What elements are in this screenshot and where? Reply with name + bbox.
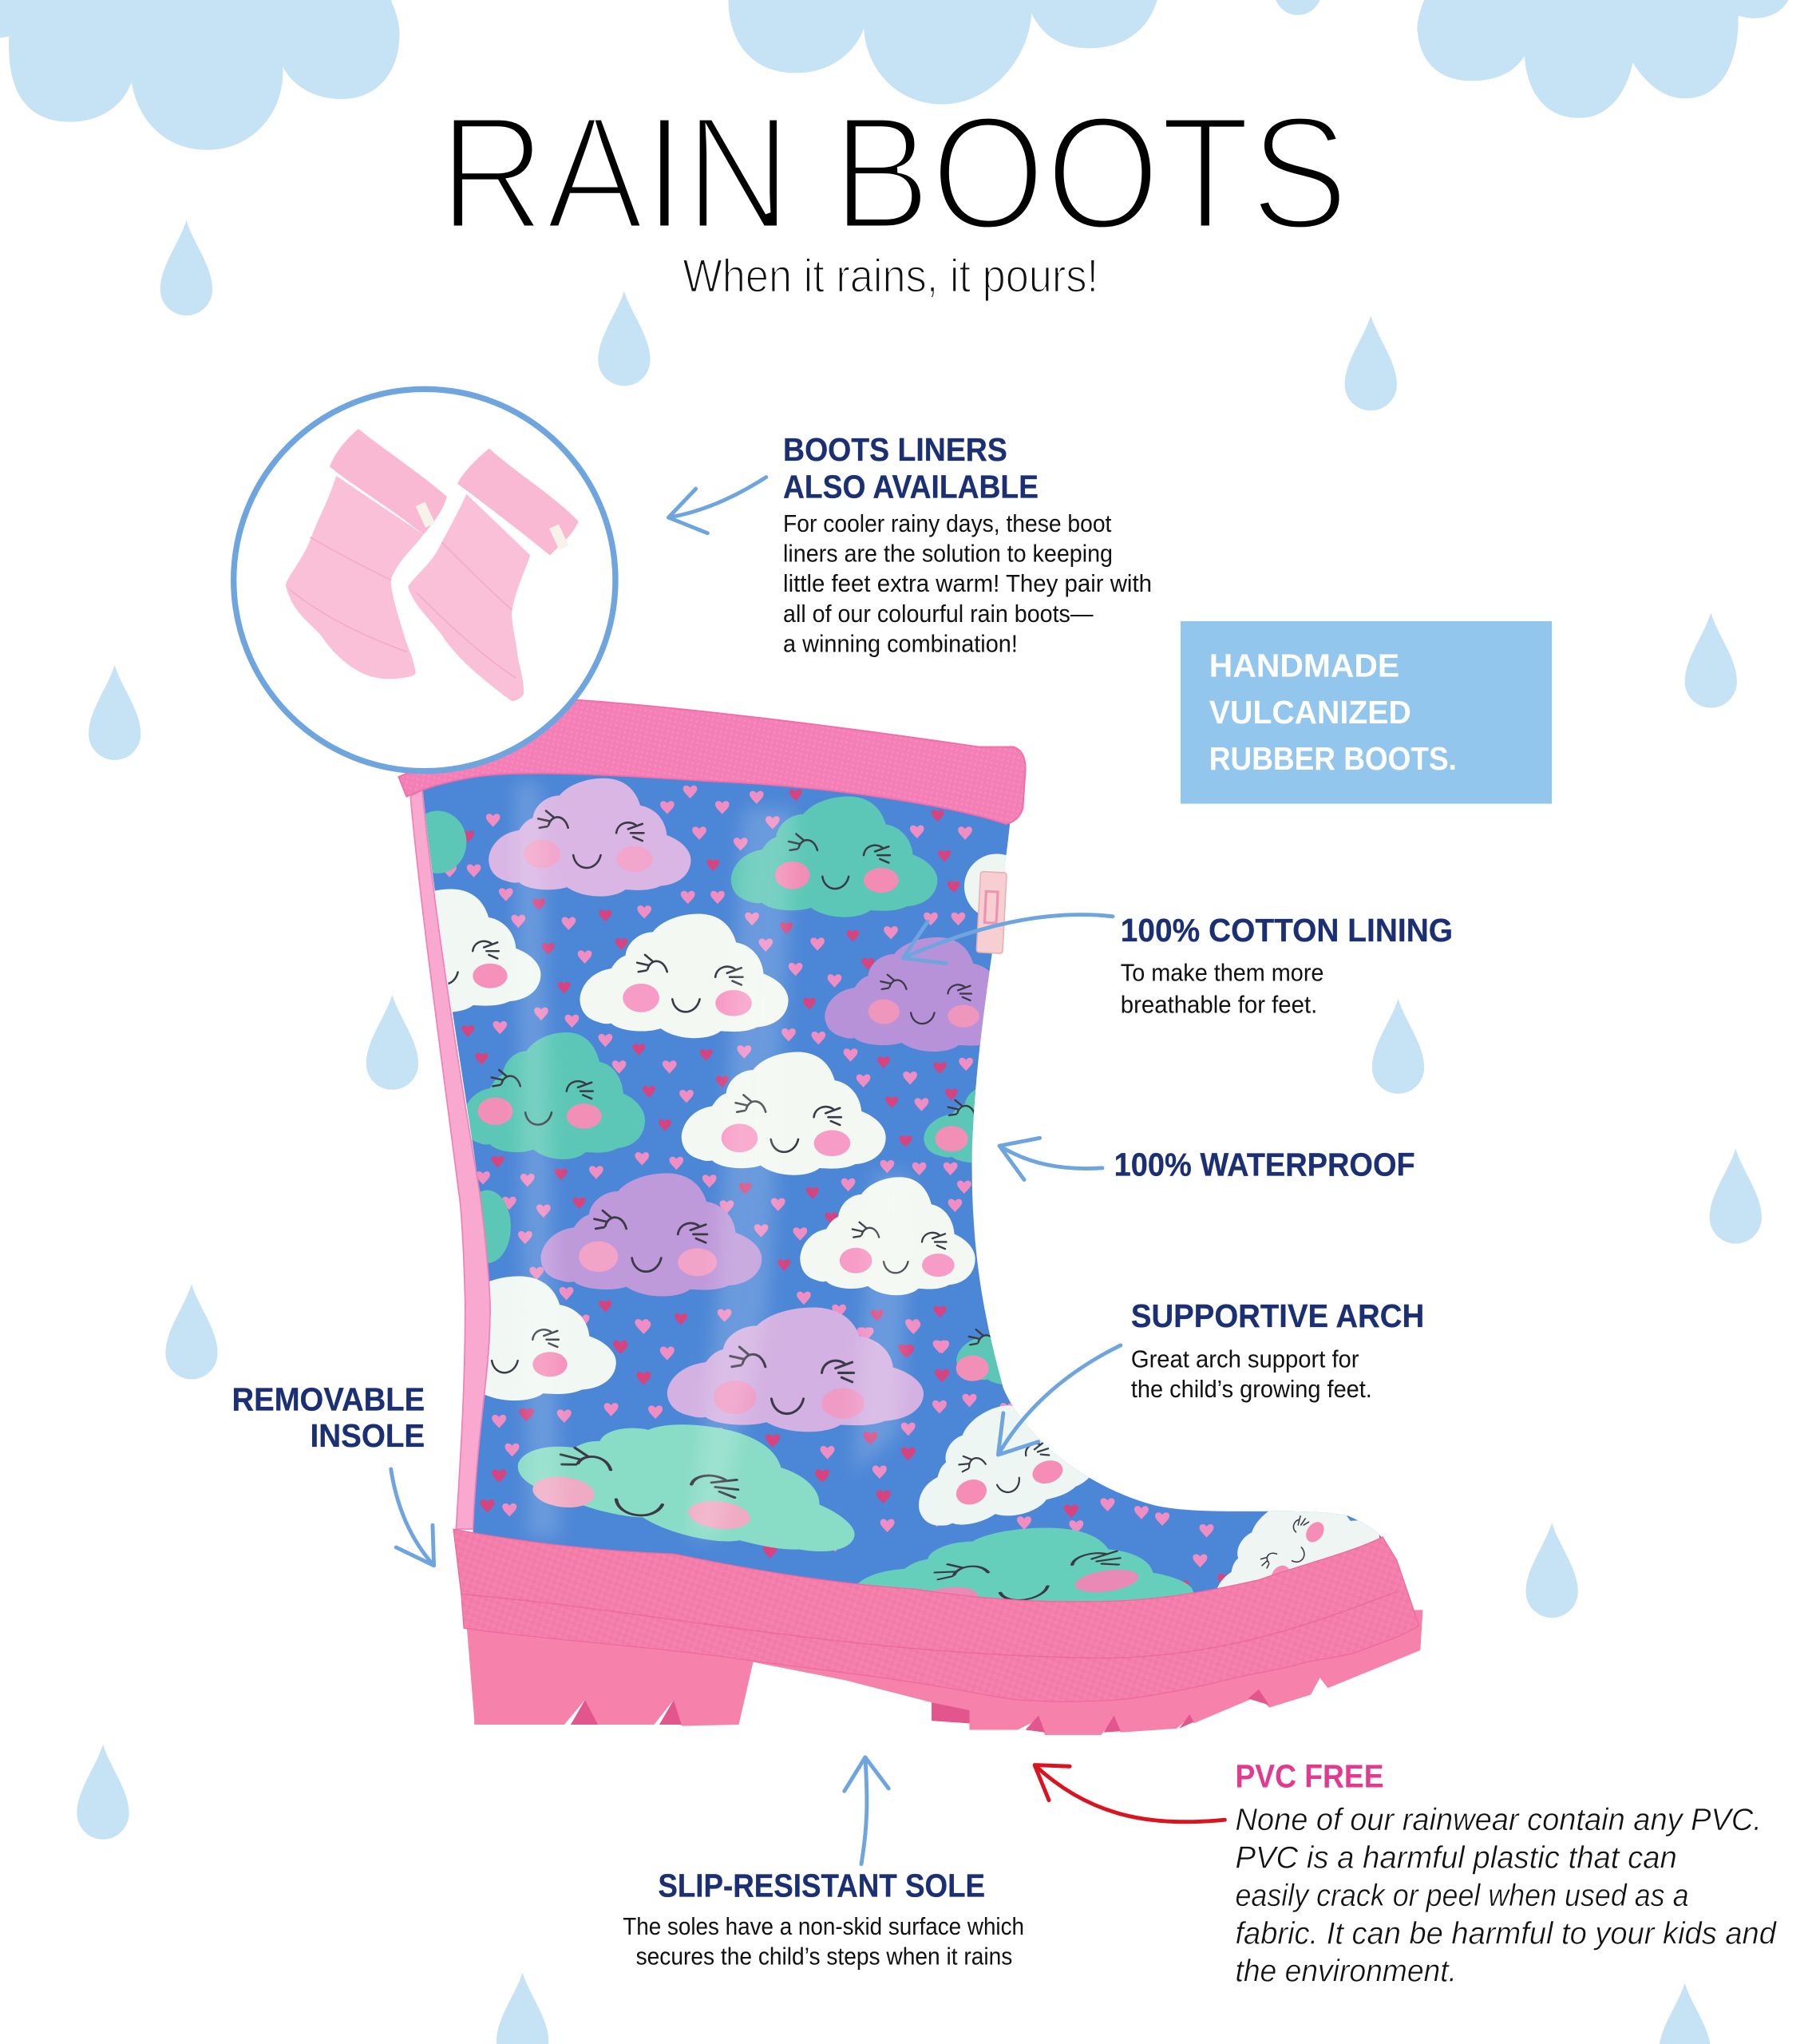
heading: BOOTS LINERS bbox=[783, 431, 1007, 468]
boot collar bbox=[398, 700, 1026, 824]
body text bbox=[783, 511, 1152, 657]
arrow to arch bbox=[998, 1345, 1121, 1455]
back seam strip bbox=[410, 790, 490, 1529]
callout: cotton lining bbox=[903, 912, 1453, 1019]
heading: SUPPORTIVE ARCH bbox=[1131, 1297, 1424, 1334]
body text: little feet extra warm! They pair with bbox=[783, 571, 1152, 597]
callout: supportive arch bbox=[998, 1297, 1424, 1455]
body text: secures the child’s steps when it rains bbox=[636, 1943, 1012, 1970]
banner: handmade vulcanized rubber boots: VULCANIZED bbox=[1209, 694, 1411, 731]
heading: REMOVABLE bbox=[232, 1381, 425, 1418]
banner: handmade vulcanized rubber boots bbox=[1181, 621, 1552, 804]
arrow to sole bbox=[845, 1757, 888, 1864]
red arrow bbox=[1035, 1765, 1225, 1822]
body text bbox=[1235, 1803, 1777, 1989]
rain boot bbox=[332, 700, 1434, 1735]
body text bbox=[623, 1914, 1024, 1970]
background clouds bbox=[0, 0, 1789, 150]
body text: easily crack or peel when used as a bbox=[1235, 1879, 1689, 1913]
subtitle: When it rains, it pours! bbox=[682, 251, 1098, 303]
callout: boot liners bbox=[668, 431, 1152, 657]
cloud: top left bbox=[0, 0, 400, 150]
arrow to liners bbox=[668, 477, 766, 533]
arrow to insole bbox=[391, 1469, 434, 1566]
heading: ALSO AVAILABLE bbox=[783, 469, 1039, 505]
welt crease bbox=[461, 1591, 1397, 1658]
heading: 100% WATERPROOF bbox=[1114, 1147, 1415, 1183]
cloud: top right bbox=[1417, 0, 1789, 118]
callout: removable insole bbox=[232, 1381, 434, 1566]
cloud print bbox=[332, 778, 1390, 1630]
glossy highlights bbox=[515, 782, 912, 1539]
body text: fabric. It can be harmful to your kids and bbox=[1235, 1916, 1777, 1951]
heading: PVC FREE bbox=[1235, 1757, 1384, 1794]
left liner sock bbox=[285, 429, 447, 679]
boot sole with tread bbox=[466, 1610, 1423, 1735]
body text: The soles have a non-skid surface which bbox=[623, 1914, 1024, 1940]
body text: the environment. bbox=[1235, 1955, 1457, 1989]
banner: handmade vulcanized rubber boots: RUBBER BOOTS. bbox=[1209, 740, 1457, 777]
small drop at top edge bbox=[1274, 0, 1321, 15]
body text: None of our rainwear contain any PVC. bbox=[1235, 1803, 1762, 1837]
heart print (lower boot) bbox=[481, 1321, 1232, 1594]
body text: For cooler rainy days, these boot bbox=[783, 511, 1112, 537]
callout: waterproof bbox=[999, 1138, 1415, 1183]
body text: PVC is a harmful plastic that can bbox=[1235, 1841, 1677, 1876]
inset circle: boot liners bbox=[234, 389, 615, 771]
body text: all of our colourful rain boots— bbox=[783, 601, 1094, 628]
heading bbox=[232, 1381, 425, 1454]
right liner sock bbox=[408, 449, 579, 701]
arrow to lining bbox=[903, 915, 1113, 964]
heart print (upper shaft) bbox=[442, 786, 973, 1384]
body text: breathable for feet. bbox=[1121, 992, 1317, 1019]
cloud: top centre bbox=[728, 0, 1157, 105]
body text: Great arch support for bbox=[1131, 1347, 1359, 1373]
body text: liners are the solution to keeping bbox=[783, 541, 1113, 568]
body text: a winning combination! bbox=[783, 631, 1018, 657]
body text bbox=[1131, 1347, 1372, 1403]
boot welt band bbox=[453, 1529, 1419, 1701]
arrow to shaft bbox=[999, 1138, 1102, 1180]
cuff tab label bbox=[976, 871, 1007, 953]
body text: To make them more bbox=[1121, 961, 1323, 987]
heading: 100% COTTON LINING bbox=[1121, 912, 1453, 949]
heading: SLIP-RESISTANT SOLE bbox=[658, 1868, 985, 1904]
body text: the child’s growing feet. bbox=[1131, 1377, 1372, 1403]
heading: INSOLE bbox=[310, 1417, 425, 1454]
title: RAIN BOOTS bbox=[439, 82, 1348, 263]
body text bbox=[1121, 961, 1323, 1019]
banner: handmade vulcanized rubber boots: HANDMADE bbox=[1209, 647, 1399, 683]
callout: slip-resistant sole bbox=[623, 1757, 1024, 1970]
callout: PVC free bbox=[1035, 1757, 1777, 1989]
boot shaft with cloud print bbox=[423, 774, 1381, 1602]
heading bbox=[783, 431, 1039, 505]
